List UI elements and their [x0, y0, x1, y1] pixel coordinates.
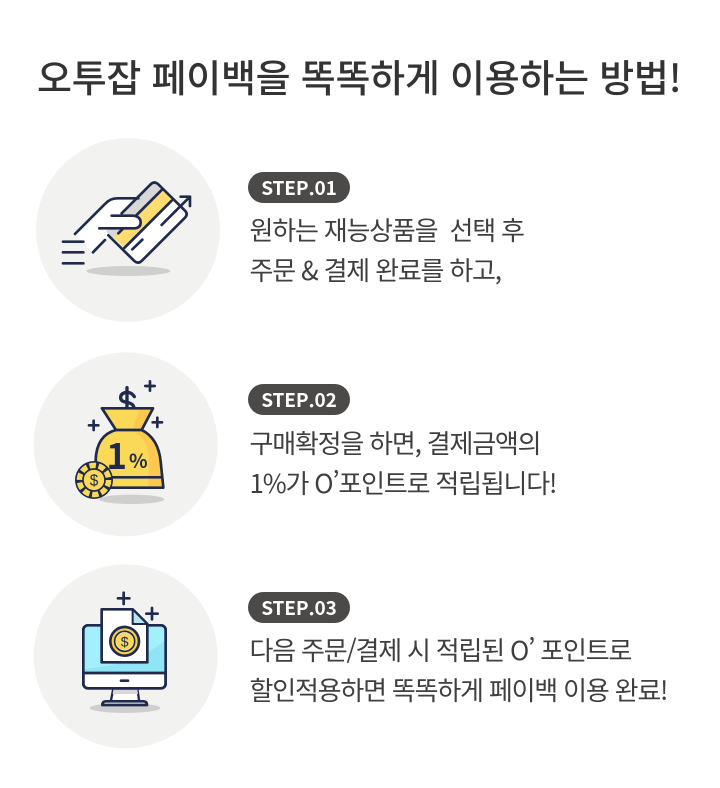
title: 오투잡 페이백을 똑똑하게 이용하는 방법!: [37, 48, 681, 103]
step 2 badge: STEP.02: [261, 386, 337, 413]
step 3 badge: [248, 592, 350, 623]
icon: money bag with 1%: [34, 352, 218, 536]
icon: monitor with coin document: [34, 564, 218, 748]
step 2 badge: [248, 384, 350, 415]
icon: money bag with 1%: %: [129, 446, 148, 474]
step 2 text: 구매확정을 하면, 결제금액의 1%가 O’포인트로 적립됩니다!: [250, 424, 556, 501]
step 3 badge: STEP.03: [261, 594, 337, 621]
icon: monitor with coin document: $: [121, 633, 129, 649]
icon: money bag with 1%: 1: [106, 429, 127, 480]
icon: money bag with 1%: $: [90, 472, 99, 489]
step 3 text: 다음 주문/결제 시 적립된 O’ 포인트로 할인적용하면 똑똑하게 페이백 이용 완료!: [250, 631, 667, 708]
step 1 badge: STEP.01: [261, 174, 337, 201]
icon: credit card in hand: [36, 138, 220, 322]
step 1 badge: [248, 172, 350, 203]
step 1 text: 원하는 재능상품을 선택 후 주문 & 결제 완료를 하고,: [250, 211, 524, 288]
